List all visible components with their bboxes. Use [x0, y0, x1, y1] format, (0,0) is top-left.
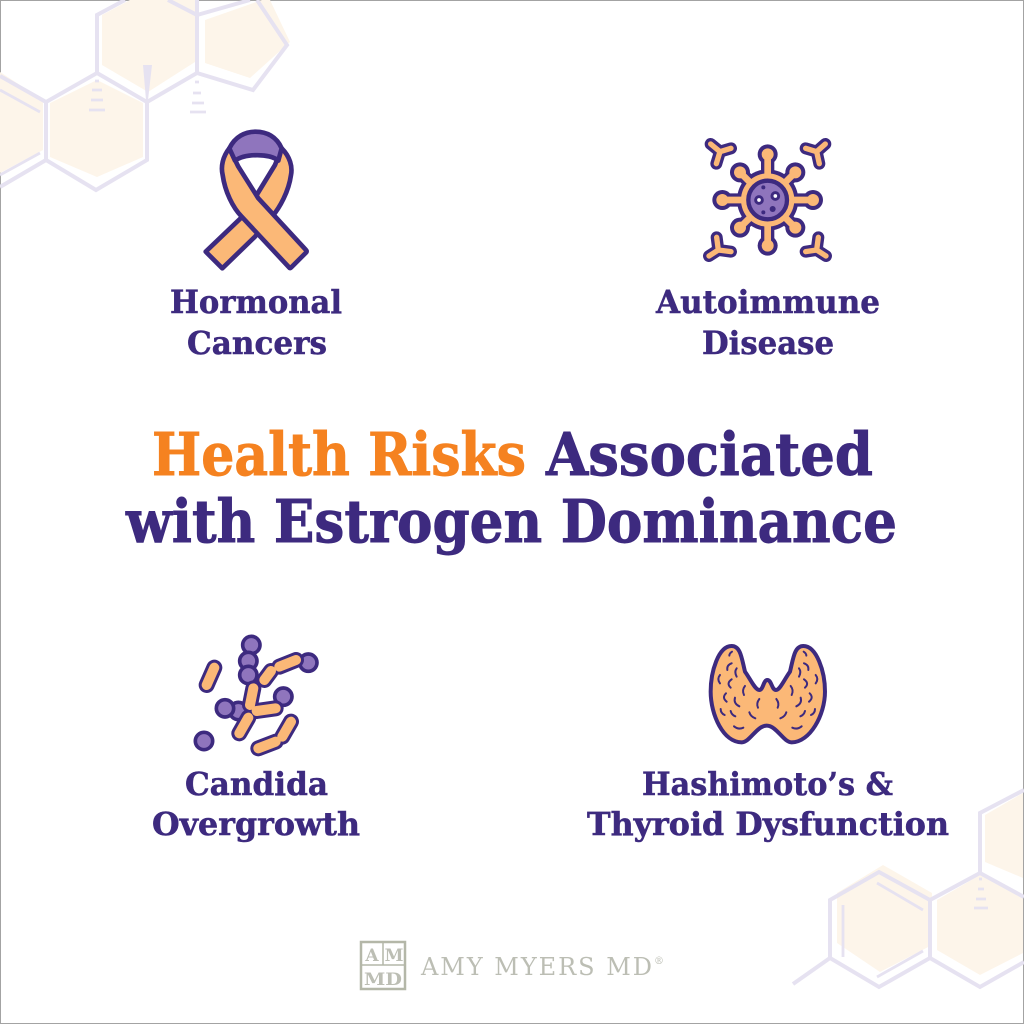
icon: autoimmune virus [709, 144, 826, 256]
label: Hormonal Cancers: Hormonal [170, 283, 342, 321]
icon: candida cells [195, 636, 317, 750]
label: Hashimoto's and Thyroid Dysfunction: Thyroid Dysfunction [587, 805, 949, 843]
label: Autoimmune Disease: Disease [702, 324, 834, 362]
molecule decoration: bottom right [793, 790, 1024, 987]
title: Health Risks [152, 420, 526, 489]
label: Hashimoto's and Thyroid Dysfunction: Hashimoto’s & [642, 765, 893, 803]
label: Autoimmune Disease: Autoimmune [655, 283, 880, 321]
title [125, 420, 897, 556]
spike fills [709, 144, 826, 256]
logo: Amy Myers MD: ® [654, 956, 664, 967]
label: Hashimoto's and Thyroid Dysfunction [587, 765, 949, 843]
icon: thyroid gland [711, 646, 825, 742]
label: Hormonal Cancers [170, 283, 342, 362]
logo mark: M [385, 946, 404, 966]
logo mark: MD [364, 970, 402, 990]
label: Candida Overgrowth [152, 765, 360, 843]
label: Candida Overgrowth: Overgrowth [152, 805, 360, 843]
label: Hormonal Cancers: Cancers [187, 324, 327, 362]
label: Autoimmune Disease [655, 283, 880, 362]
icon: awareness ribbon [206, 132, 307, 268]
title: Associated [545, 420, 873, 489]
molecule decoration: top left [0, 0, 290, 190]
spike outlines [709, 144, 826, 256]
logo wordmark: AMY MYERS MD [420, 953, 652, 981]
logo mark: A [364, 946, 379, 966]
title: with Estrogen Dominance [125, 487, 897, 556]
logo mark [361, 942, 405, 990]
label: Candida Overgrowth: Candida [185, 765, 328, 803]
logo: Amy Myers MD [361, 942, 664, 990]
